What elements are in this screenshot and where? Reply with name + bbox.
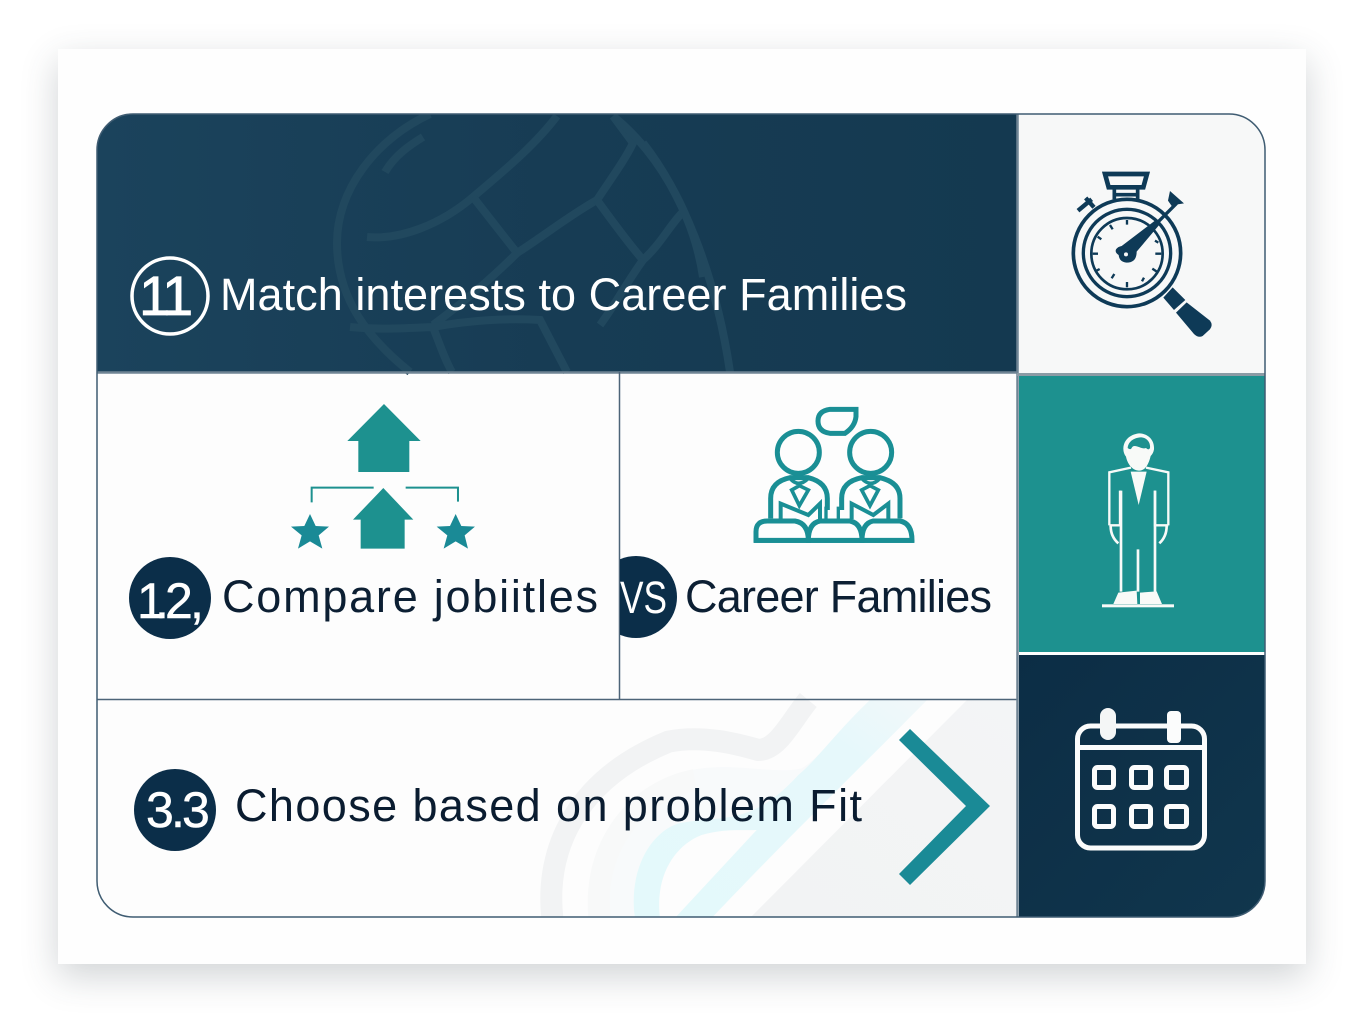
icon: two people with speech bubble — [754, 409, 914, 541]
step 3 badge — [134, 769, 216, 851]
step 3 badge: 3.3 — [146, 782, 210, 838]
vs badge: VS — [620, 572, 667, 623]
panel: stopwatch cell — [1017, 114, 1265, 373]
infographic — [96, 113, 1266, 918]
step 2 badge — [129, 557, 211, 639]
career families heading: Career Families — [685, 571, 992, 622]
icon: calendar — [1077, 708, 1205, 848]
background swirl — [551, 700, 1018, 918]
globe watermark — [337, 114, 730, 372]
panel: white base — [97, 114, 1017, 917]
step 2 badge: 1.2, — [137, 573, 204, 629]
vs badge — [620, 556, 677, 638]
icon: standing person in suit — [1102, 433, 1174, 607]
step 3 heading: Choose based on problem Fit — [235, 780, 862, 831]
step 1 badge: 11 — [139, 264, 193, 327]
panel: teal person cell — [1019, 376, 1265, 652]
outer frame — [97, 114, 1265, 917]
panel: navy calendar cell — [1019, 655, 1265, 917]
icon: stopwatch with magnifier — [1073, 174, 1212, 337]
step 1 heading: Match interests to Career Families — [220, 269, 907, 320]
grid lines — [97, 114, 1265, 917]
step 1 badge — [132, 258, 208, 334]
arrow: chevron — [899, 729, 990, 885]
step 2 heading: Compare jobiitles — [222, 571, 598, 622]
icon: houses and stars hierarchy — [291, 404, 475, 549]
panel: match interests header — [97, 114, 1017, 372]
panel: choose based on fit — [551, 700, 1018, 918]
